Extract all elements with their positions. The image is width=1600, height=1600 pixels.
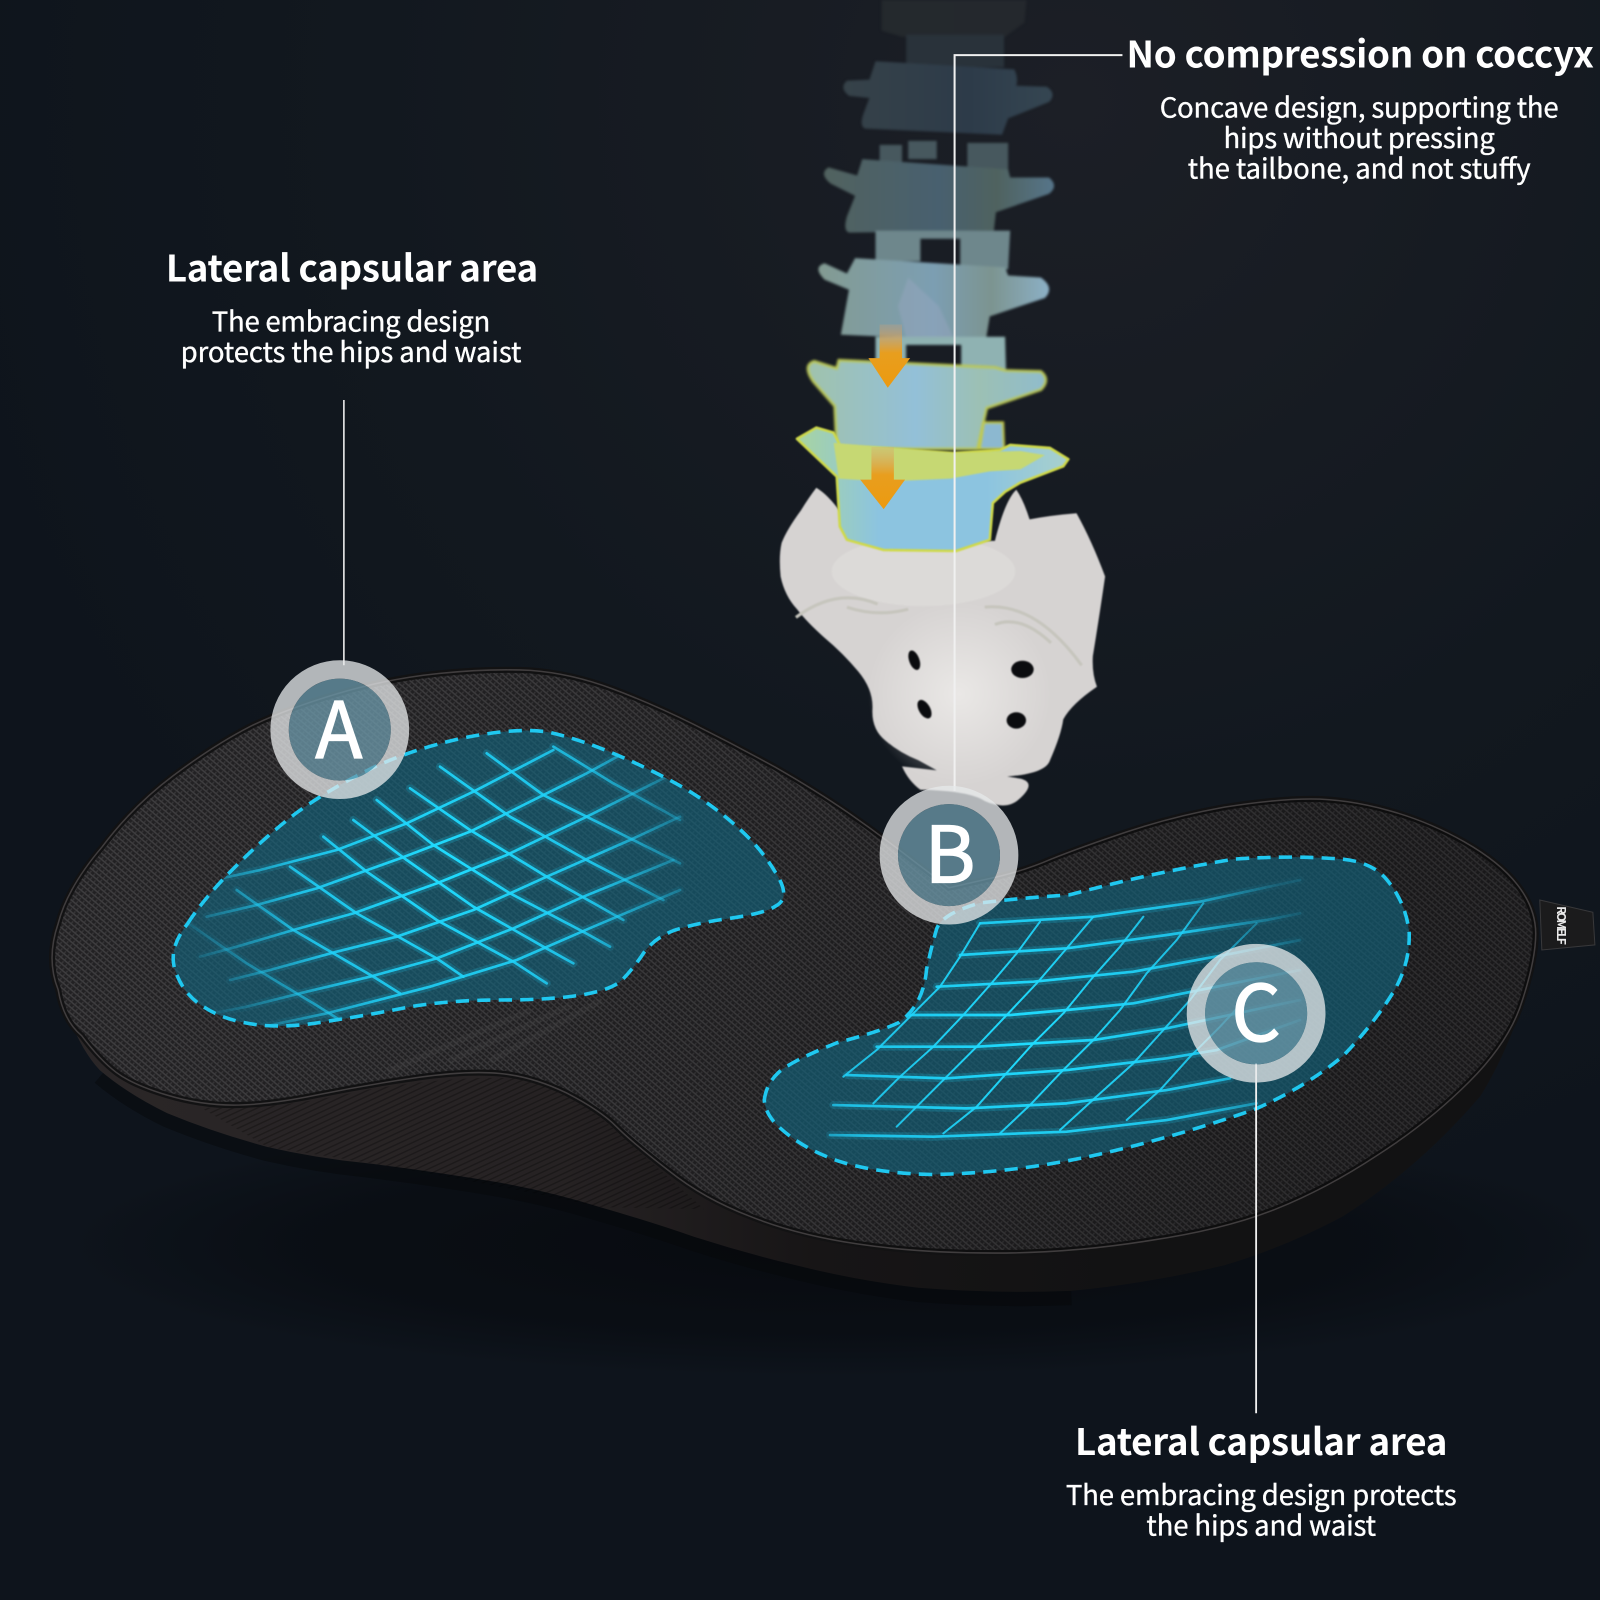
cushion shadow	[61, 1112, 1600, 1378]
tag on cushion	[1540, 900, 1595, 950]
callout B text: the tailbone, and not stuffy	[1188, 147, 1531, 187]
cushion	[52, 670, 1536, 1298]
badge B: B	[925, 794, 975, 906]
shadow under wall	[100, 1077, 1071, 1298]
neck 1	[906, 35, 1004, 67]
grid C	[830, 880, 1300, 1137]
badge C: C	[1231, 952, 1281, 1064]
articular pieces 1-2	[880, 141, 1008, 176]
callout A text: protects the hips and waist	[181, 330, 521, 370]
articular piece	[980, 422, 1004, 449]
arrow: upper compression	[868, 324, 910, 388]
lavender highlight	[898, 278, 957, 345]
articular pieces 2-3	[876, 231, 1010, 269]
badge A	[280, 669, 400, 790]
zone A: lateral capsular area	[173, 730, 784, 1027]
callout C text: The embracing design protects	[1066, 1473, 1457, 1513]
sacral holes	[906, 649, 1034, 729]
callout B text: No compression on coccyx	[1127, 24, 1594, 78]
callout A text	[166, 239, 538, 370]
sacrum	[780, 488, 1105, 805]
dashed outline C	[764, 857, 1409, 1174]
articular pieces 3-4	[876, 337, 1006, 376]
grid A	[183, 747, 680, 1027]
cushion side wall	[59, 949, 1536, 1292]
leader line C	[1255, 1063, 1257, 1413]
sacrum shading	[796, 598, 1082, 665]
yellow compression band	[834, 443, 1045, 482]
callout B text: Concave design, supporting the	[1160, 85, 1559, 125]
fabric sheen streaks	[388, 1000, 602, 1071]
cushion top surface	[52, 670, 1536, 1253]
callout A text: The embracing design	[212, 300, 490, 340]
spine illustration	[808, 0, 1054, 449]
vertebra 2	[824, 159, 1054, 233]
tag text: ROMELF	[1553, 906, 1571, 945]
badge C	[1196, 952, 1316, 1073]
sacrum centre glow	[867, 602, 1051, 786]
callout C text: the hips and waist	[1146, 1504, 1376, 1544]
vertebra 4	[808, 360, 1046, 449]
side wall weave	[200, 1078, 704, 1209]
vertebra 1	[843, 61, 1053, 135]
callout B text	[1127, 24, 1594, 187]
top vertebra	[882, 0, 1027, 37]
surface shading	[52, 670, 1536, 1253]
arrow: lower compression	[860, 447, 905, 509]
callout C text	[1066, 1412, 1457, 1544]
lumbar vertebra with yellow band	[797, 428, 1068, 551]
badge B	[889, 794, 1009, 915]
badge A: A	[315, 669, 362, 781]
leader line B	[955, 55, 1122, 791]
zone C: lateral capsular area	[764, 857, 1409, 1174]
vertebra 3	[818, 258, 1049, 341]
callout A text: Lateral capsular area	[166, 239, 538, 293]
dashed outline A	[173, 730, 784, 1026]
leader line A	[343, 400, 345, 665]
callout C text: Lateral capsular area	[1075, 1412, 1447, 1466]
callout B text: hips without pressing	[1223, 116, 1495, 156]
sacrum dome	[832, 537, 1015, 606]
